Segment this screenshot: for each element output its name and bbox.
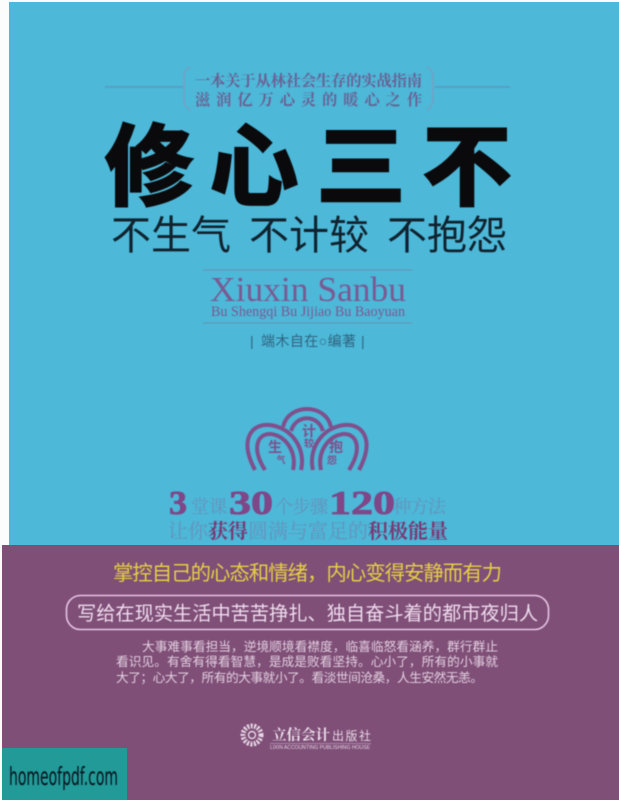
method summary lines: 让你	[168, 520, 209, 543]
panel: blue upper cover	[9, 2, 619, 545]
panel: purple lower cover	[2, 545, 619, 800]
publisher logo: 立信会计	[272, 726, 330, 744]
pinyin title block: Xiuxin Sanbu	[210, 270, 406, 309]
pinyin title block	[203, 270, 412, 323]
method summary lines: 获得	[208, 519, 248, 543]
subtitle: 不生气	[111, 214, 231, 258]
title: 不	[423, 118, 511, 217]
title	[105, 118, 511, 217]
title: 三	[317, 118, 405, 217]
method summary lines: 个步骤	[275, 497, 328, 517]
body paragraph: 看识见。有舍有得看智慧，是成是败看坚持。心小了，所有的小事就	[116, 654, 498, 669]
author line: 端木自在○编著	[261, 333, 356, 349]
watermark badge	[2, 748, 127, 800]
body paragraph	[116, 639, 498, 686]
icon: three-arch emblem: 怨	[327, 454, 337, 467]
watermark badge: homeofpdf.com	[9, 762, 118, 791]
icon: three-arch emblem: 抱	[329, 439, 343, 455]
subtitle: 不抱怨	[387, 214, 507, 258]
pinyin title block: Bu Shengqi Bu Jijiao Bu Baoyuan	[211, 304, 406, 320]
method summary lines: 圆满与富足的	[248, 520, 368, 543]
method summary lines: 堂课	[191, 497, 227, 517]
author line: |	[250, 333, 254, 349]
subtitle: 不计较	[249, 214, 369, 258]
title: 修	[105, 118, 193, 217]
method summary lines: 3	[169, 485, 187, 522]
yellow headline: 掌控自己的心态和情绪，内心变得安静而有力	[113, 562, 502, 585]
callout: rounded audience banner	[66, 596, 548, 630]
method summary lines	[168, 485, 448, 543]
publisher logo	[243, 726, 371, 751]
slogan block: 一本关于从林社会生存的实战指南	[195, 72, 422, 90]
method summary lines: 30	[229, 485, 273, 522]
title: 心	[210, 118, 298, 217]
publisher logo: LIXIN ACCOUNTING PUBLISHING HOUSE	[270, 745, 371, 751]
subtitle	[111, 214, 507, 258]
slogan block	[105, 67, 510, 110]
icon: three-arch emblem: 计	[302, 423, 316, 439]
method summary lines: 种方法	[393, 497, 447, 517]
body paragraph: 大了；心大了，所有的大事就小了。看淡世间沧桑，人生安然无恙。	[116, 670, 483, 686]
icon: three-arch emblem: 较	[304, 437, 314, 450]
icon: three-arch emblem: 气	[276, 454, 286, 465]
slogan block: 滋润亿万心灵的暖心之作	[195, 91, 422, 109]
method summary lines: 积极能量	[368, 520, 448, 543]
method summary lines: 120	[329, 485, 395, 522]
author line: |	[361, 333, 365, 349]
icon: three-arch emblem: 生	[268, 439, 282, 455]
icon: three-arch emblem	[248, 409, 366, 470]
body paragraph: 大事难事看担当，逆境顺境看襟度，临喜临怒看涵养，群行群止	[142, 639, 498, 654]
callout: rounded audience banner: 写给在现实生活中苦苦挣扎、独自奋斗着的都市夜归人	[77, 603, 538, 625]
publisher logo: 出版社	[332, 728, 371, 743]
